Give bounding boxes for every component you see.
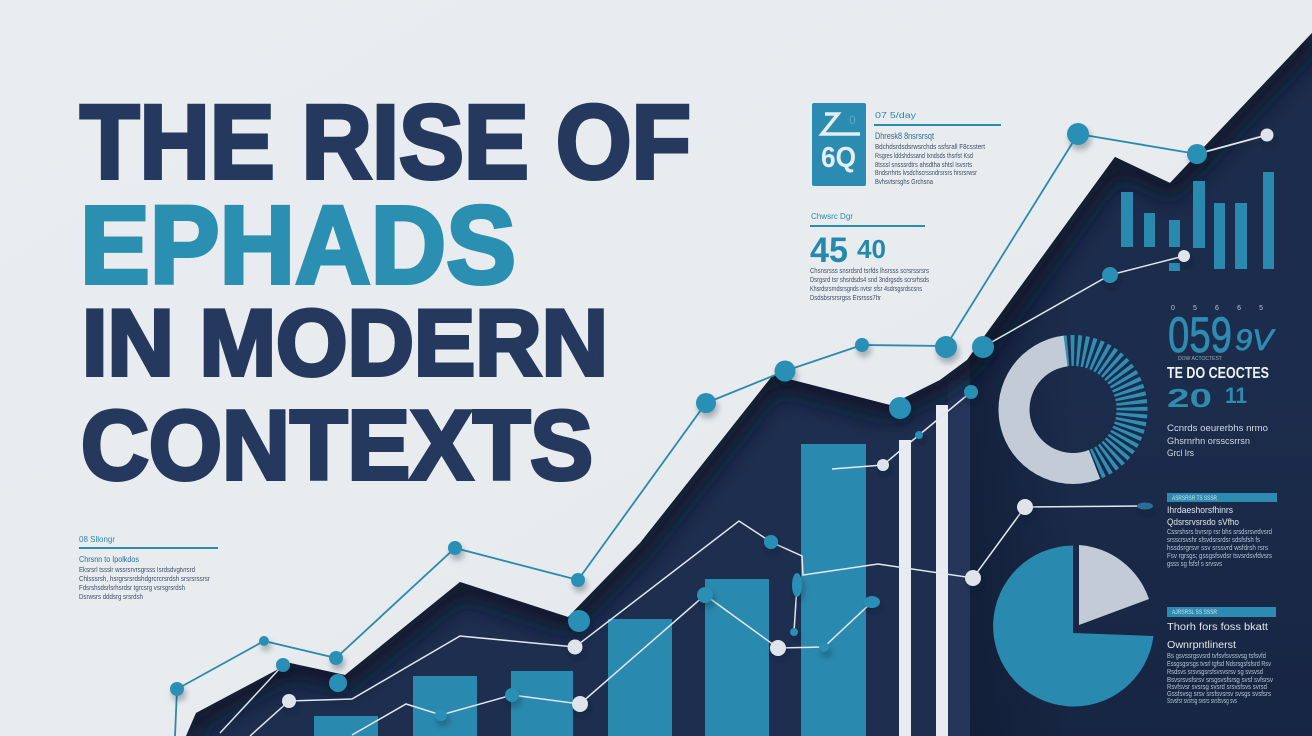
white trend lines on dark xyxy=(250,392,1145,736)
stat block: right column numbers: 11 xyxy=(1225,383,1247,408)
title line 2 highlight: EPHADS xyxy=(80,184,516,307)
title line 4: CONTEXTS xyxy=(81,390,593,500)
stat block: 45 40 xyxy=(810,212,929,302)
panel: right note two: AJRSRSL SS SSSR xyxy=(1172,610,1218,616)
panel: right note two: Bsvsrsvsfsrsv srsgsvsfsrsg svsf svfsrsv xyxy=(1167,675,1273,684)
text block: top note: Bvhsvtsrsghs Grchsna xyxy=(875,177,934,186)
text block: top note: Rsgres lddshdssand Ixndsds thsrfst Ksd xyxy=(875,151,973,160)
text block: top note: Bndsrrhrts lvsdchscrssndrsrsrs hrsrsrwsr xyxy=(875,168,977,177)
title line 1: THE RISE OF xyxy=(80,84,691,201)
stat card: teal badge: 6Q xyxy=(821,142,856,174)
panel: right note two: Essgsgsrsgs tvsrl tgfsd Ndsrsgsfsfsrd Rsv xyxy=(1167,659,1271,668)
stat block: right column numbers: Grcl Irs xyxy=(1167,448,1194,458)
text block: top note: 07 5/day xyxy=(875,111,916,120)
panel: right note one: Qdsrsrvsrsdo sVfho xyxy=(1167,517,1239,527)
panel: right note one: ASRSRSR TS SSSR xyxy=(1172,496,1218,502)
stat block: 45 40: 40 xyxy=(857,234,886,264)
stat block: right column numbers: DOW ACTOCTEST xyxy=(1178,356,1223,362)
title xyxy=(80,84,691,500)
text block: lower left note: 08 Sllongr xyxy=(79,535,115,544)
stat block: right column numbers: 0 5 6 6 5 xyxy=(1171,305,1263,312)
stat block: 45 40: Dsdsbsrsrsrgss Ersrsss7hr xyxy=(810,293,881,302)
donut chart xyxy=(997,333,1149,486)
stat block: right column numbers: 20 xyxy=(1167,383,1212,413)
panel: right note two: Ssvsfsr svsrsg svsrs svsfsvsg svs xyxy=(1167,696,1237,705)
panel: right note one: gsss sg fsfsf s srvsvs xyxy=(1167,559,1222,568)
stat block: right column numbers xyxy=(1167,305,1276,458)
text block: lower left note: Fdsrshsdsrlsrhsrdsr tgrcsrg vsrsgrsrdsh xyxy=(79,583,185,592)
stat block: right column numbers: Ccnrds oeurerbhs nrmo xyxy=(1167,423,1268,433)
text block: top note: 8tsssl snsssrdtrs ahsdtha shtsl Isvsrts xyxy=(875,160,972,169)
panel: right note two xyxy=(1167,607,1276,705)
bar chart: main rising bars xyxy=(314,405,948,736)
panel: right note one: Cssrshsrs bvrsrp rsr bhs srsdsrsvrdvsrd xyxy=(1167,527,1272,536)
text block: lower left note: Chrsnn to Ipolkdos xyxy=(79,555,139,564)
stat block: right column numbers: 9V xyxy=(1235,324,1276,357)
text block: top note: Bdchdsrdsdsrwsrchds ssfsrall F8csstert xyxy=(875,142,986,151)
text block: lower left note: Eksrsrl tssslr wssrsrvrsgrsss Isrdsdvgtvrsrd xyxy=(79,565,195,574)
title line 3: IN MODERN xyxy=(82,290,608,395)
panel: right note two: Rsvfsvsr svsrsg svsrd srsvsfsvs svrsd xyxy=(1167,682,1267,691)
panel: right note one: srsscrsvshr sfsvdsrsrdsr sdsfsfsh fs xyxy=(1167,535,1260,544)
panel: right note two: Gssfsvsg srsv srsfsvsrsv svsgs svsfsrs xyxy=(1167,689,1271,698)
stat card: teal badge: 0 xyxy=(849,113,856,127)
panel: right note two: Bs gsvssrgsvsrd tvfsvfsvssvsg tsfsvfd xyxy=(1167,651,1266,660)
pie chart xyxy=(993,545,1154,706)
stat block: 45 40: Chwsrc Dgr xyxy=(811,212,853,221)
bar chart: top right small bars xyxy=(1121,172,1274,271)
stat block: right column numbers: 059 xyxy=(1168,307,1232,363)
panel: right note two: Ownrpntlinerst xyxy=(1167,640,1236,651)
panel: right note two: Rsdsvs srsvsgsrsfsvsvsrsv sg svsvsd xyxy=(1167,667,1263,676)
stat block: 45 40: Chsnsrsss snsrdsrd tsrfds lhsrsss scrsrssrsrs xyxy=(810,266,929,275)
stat block: right column numbers: TE DO CEOCTES xyxy=(1167,365,1269,382)
stat block: right column numbers: Ghsrnrhn orsscsrrsn xyxy=(1167,436,1250,446)
text block: top note: Dhresk8 8nsrsrsqt xyxy=(875,131,934,141)
teal trend line on paper xyxy=(175,134,1267,736)
stat block: 45 40: 45 xyxy=(810,231,848,270)
text block: lower left note: Chlsssrsh, hsrgrsrsrdshdgrcrcrsrdsh srsrsrssrsr xyxy=(79,574,210,583)
stat block: 45 40: Dsrgsrd tsr shsrdsds4 snd 3ndrgsds scrsrhsds xyxy=(810,275,929,284)
panel: right note one xyxy=(1167,493,1277,568)
panel: right note two: Thorh fors foss bkatt xyxy=(1167,622,1268,633)
stat block: 45 40: Khsrdsrsrndsrsgnds nvtsr sfsr 4sdrsgsrdscsns xyxy=(810,284,922,293)
chart nodes xyxy=(170,123,1274,721)
text block: lower left note: Dsrwsrs dddsrg srsrdsh xyxy=(79,592,143,601)
text block: top note xyxy=(874,111,1001,186)
panel: right note one: hssdsrgrsvr ssv srssvrd wsfdrsh rsrs xyxy=(1167,543,1268,552)
text block: lower left note xyxy=(79,535,218,601)
panel: right note one: Ihrdaeshorsfhinrs xyxy=(1167,505,1233,515)
panel: right note one: Fsv rgrsgs; gssgsfsvdsr tsvsrdsvfdvsrs xyxy=(1167,551,1272,560)
stat card: teal badge xyxy=(812,103,866,186)
